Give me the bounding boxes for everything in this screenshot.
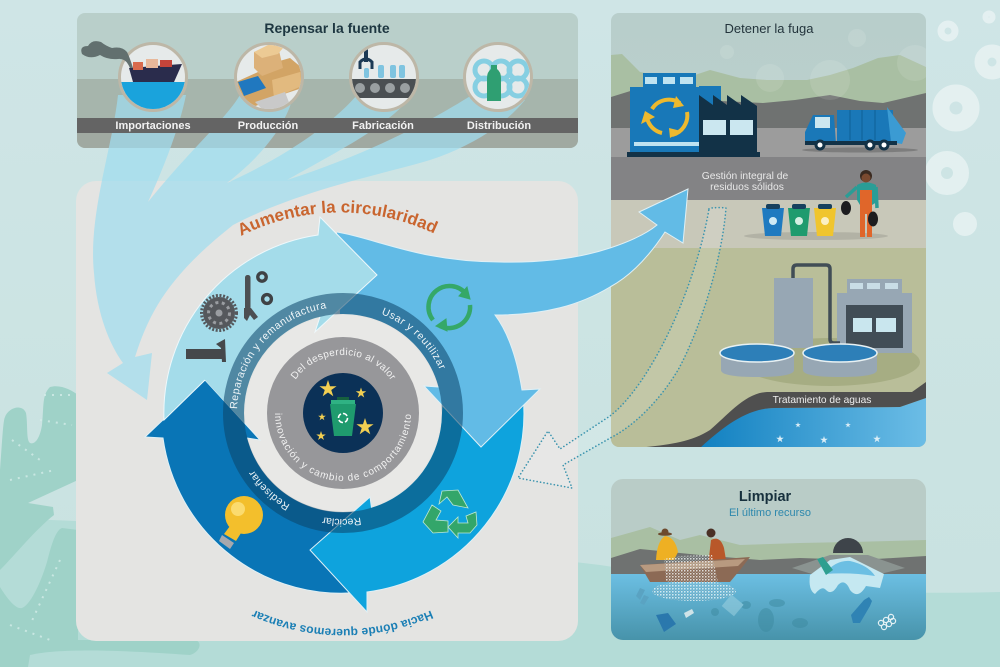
dark mountains bbox=[611, 91, 926, 128]
icon: light bulb bbox=[219, 496, 263, 549]
panel: aumentar la circularidad bbox=[76, 181, 578, 641]
label band bbox=[77, 118, 578, 133]
core text bottom: innovación y cambio de comportamiento bbox=[275, 414, 411, 482]
bubbles bbox=[933, 14, 1000, 230]
underwater debris bbox=[711, 594, 808, 632]
panel: repensar la fuente bbox=[77, 13, 578, 148]
panel: limpiar bbox=[611, 479, 926, 640]
ring label: usar: Usar y reutilizar bbox=[382, 308, 445, 368]
splash bbox=[810, 557, 884, 594]
heading: repensar la fuente: Repensar la fuente bbox=[264, 20, 390, 36]
panel: detener la fuga bbox=[611, 13, 933, 448]
icon: recycling bins bbox=[744, 204, 888, 240]
faint bubbles bbox=[756, 55, 926, 100]
icon: green circular arrows bbox=[428, 286, 470, 331]
label: tratamiento de aguas: Tratamiento de aguas bbox=[773, 395, 871, 406]
icon: nuts bbox=[258, 273, 271, 303]
icon: wrench bbox=[244, 275, 258, 321]
icon: water treatment plant bbox=[720, 265, 920, 386]
jug bbox=[656, 613, 676, 632]
icon: cardboard boxes bbox=[236, 44, 302, 112]
roads and ground bbox=[611, 128, 926, 448]
arrow: repair bbox=[164, 217, 377, 423]
stars bbox=[316, 380, 374, 440]
inner white disc bbox=[245, 315, 441, 511]
net on boat bbox=[664, 555, 718, 582]
icon: ship with smoke bbox=[81, 41, 186, 112]
label: fabricación: Fabricación bbox=[352, 120, 414, 132]
icon: garbage truck bbox=[802, 107, 918, 152]
icon: hammer bbox=[186, 339, 226, 362]
subheading: el último recurso: El último recurso bbox=[729, 507, 811, 519]
arrow: recycle bbox=[310, 380, 524, 612]
arrow: redesign bbox=[145, 380, 372, 593]
fisher in orange bbox=[706, 528, 726, 560]
heading: detener la fuga: Detener la fuga bbox=[725, 21, 814, 36]
icon: bottling conveyor bbox=[350, 44, 418, 110]
label: residuos sólidos: residuos sólidos bbox=[710, 182, 784, 193]
arrows: flows from sources bbox=[93, 95, 525, 400]
fisher in yellow bbox=[656, 528, 678, 560]
label: importaciones: Importaciones bbox=[115, 120, 191, 132]
water bbox=[695, 398, 926, 448]
water sparkles bbox=[776, 422, 881, 443]
cycle diagram bbox=[144, 188, 689, 613]
heading: limpiar: Limpiar bbox=[739, 489, 792, 505]
dark ring band bbox=[234, 304, 452, 522]
arrow: use and reuse with outflow bbox=[337, 189, 688, 447]
blue bottle bbox=[851, 597, 872, 623]
coral decoration bbox=[0, 386, 200, 667]
curved label: hacia dónde queremos avanzar: Hacia dónde queremos avanzar bbox=[252, 610, 434, 636]
ring label: reciclar: Reciclar bbox=[322, 518, 361, 527]
label: producción: Producción bbox=[238, 120, 299, 132]
rings pack bbox=[878, 614, 896, 630]
icon: recycling triangle bbox=[423, 490, 477, 538]
icon: plastic bottle and rings bbox=[464, 44, 532, 110]
core text top: Del desperdicio al valor bbox=[290, 348, 396, 380]
boat bbox=[640, 557, 750, 582]
label: distribución: Distribución bbox=[467, 120, 531, 132]
small debris bbox=[636, 588, 694, 618]
icon: recycling factory bbox=[627, 73, 760, 157]
ring label: rediseñar: Rediseñar bbox=[249, 472, 290, 511]
icon: gear bbox=[202, 296, 236, 330]
navy disc bbox=[303, 373, 383, 453]
shore bbox=[637, 382, 926, 448]
icon: person with bags bbox=[841, 170, 878, 237]
green bottle bbox=[817, 557, 833, 575]
heading: aumentar la circularidad: Aumentar la circularidad bbox=[240, 200, 438, 236]
pipe and concrete bbox=[792, 538, 905, 574]
water bbox=[611, 574, 926, 640]
grey core bbox=[267, 337, 419, 489]
green mountains bbox=[611, 54, 926, 103]
hills bbox=[611, 527, 926, 560]
ring label: reparación: Reparación y remanufactura bbox=[230, 303, 327, 408]
label: gestión integral: Gestión integral de bbox=[702, 171, 788, 182]
dotted arrow: leakage bbox=[518, 208, 726, 488]
net under water bbox=[652, 581, 736, 601]
icon: bin bbox=[330, 397, 356, 436]
